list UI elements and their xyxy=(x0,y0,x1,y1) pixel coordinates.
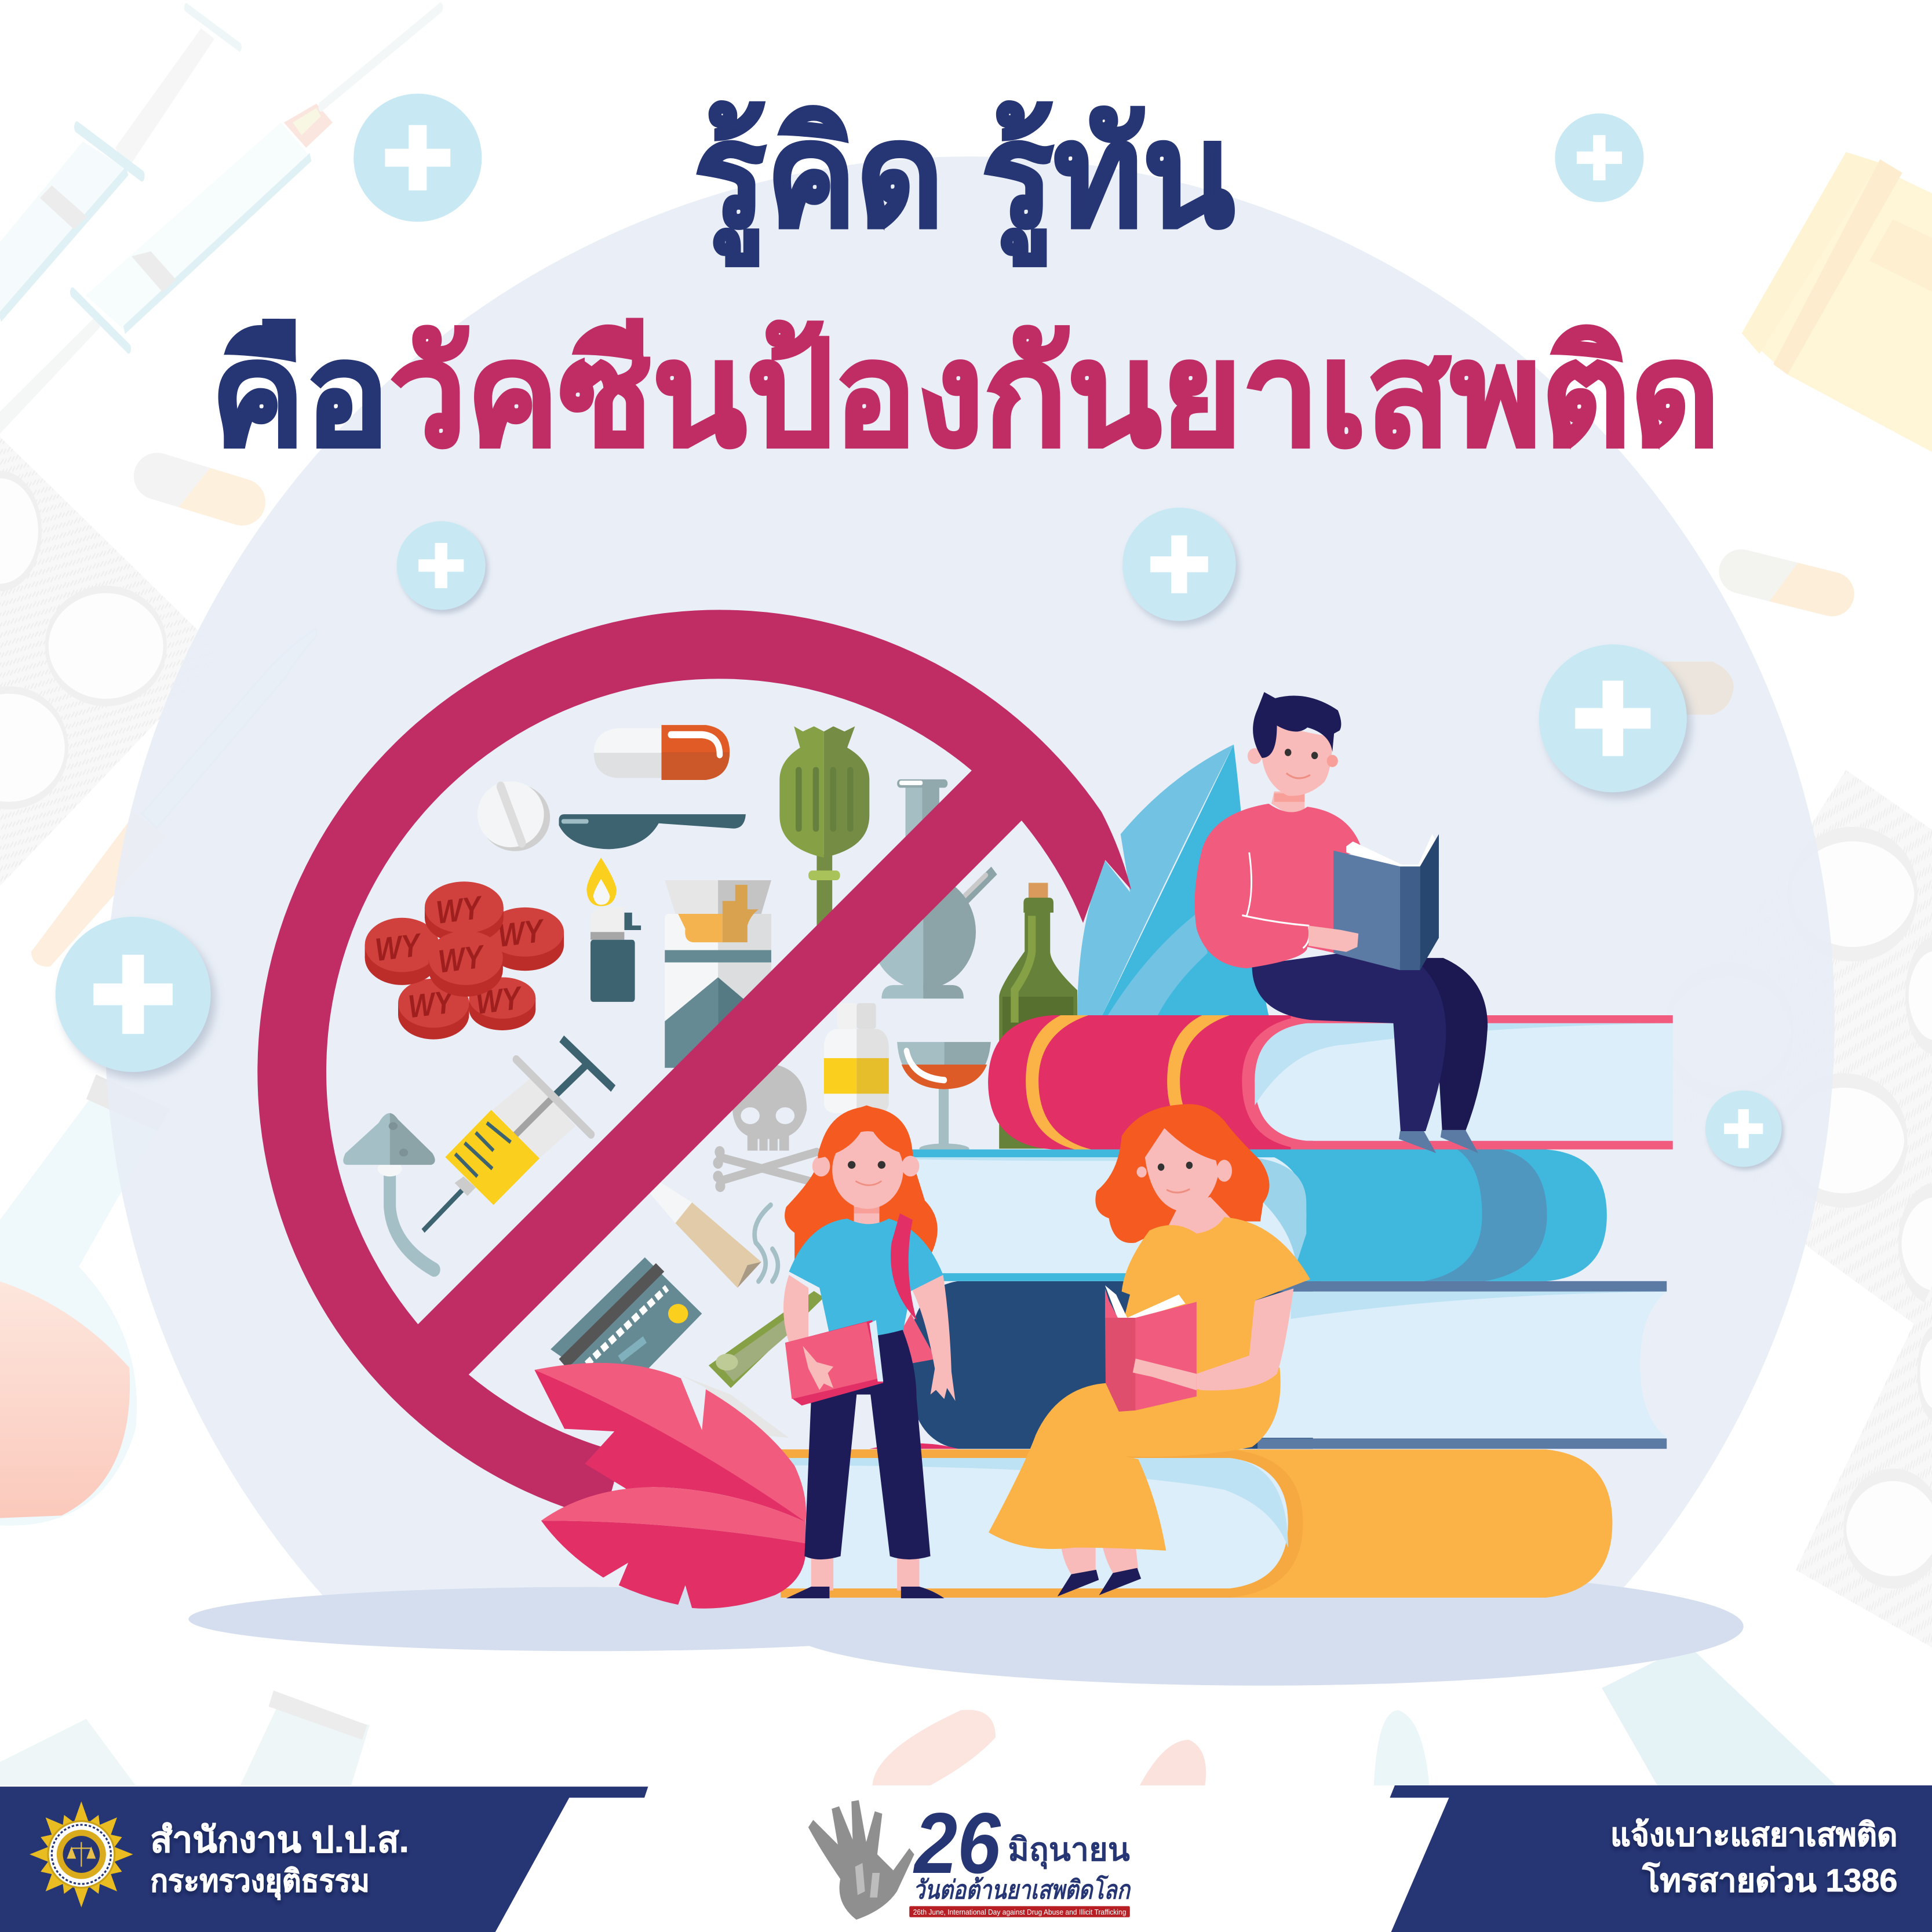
ground shadow xyxy=(188,1568,1744,1686)
plus badge 7 xyxy=(1705,1091,1784,1170)
standing girl xyxy=(783,1105,956,1598)
title line 2: navy part: คือ xyxy=(211,314,389,476)
icon: rolled banknote xyxy=(709,1291,824,1388)
faded blister pack right xyxy=(1649,770,1932,1337)
plus badge 2 xyxy=(1555,114,1643,202)
icon: spoon xyxy=(559,814,746,849)
title line 1: รู้คิด รู้ทัน xyxy=(694,94,1235,266)
icon: syringe xyxy=(423,1039,613,1231)
girl: school bag xyxy=(900,1314,936,1364)
stack of books xyxy=(781,1015,1673,1598)
prohibition sign ring xyxy=(257,610,1131,1519)
blue leaf xyxy=(1077,745,1268,1015)
book: blue second book xyxy=(912,1150,1607,1281)
drug icons inside the prohibition sign xyxy=(343,725,1077,1438)
faded yellow sachet xyxy=(1742,152,1932,452)
book: yellow bottom book xyxy=(781,1449,1612,1598)
icon: lighter xyxy=(586,858,641,1002)
faded ampoule xyxy=(31,628,316,967)
faded blister pack lower right xyxy=(1796,1285,1932,1647)
icon: tablet xyxy=(477,781,550,851)
man: sweater xyxy=(1195,804,1363,968)
man: hand xyxy=(1308,925,1358,952)
icon: laboratory flask / bong xyxy=(870,779,994,998)
icon: white medicine bottle xyxy=(824,1003,889,1113)
girl and pink leaf xyxy=(534,1105,956,1609)
man: shoes xyxy=(1399,1130,1478,1153)
woman: legs and shoes xyxy=(1059,1544,1140,1595)
26 June logo lettering xyxy=(909,1795,1131,1917)
faded flask left xyxy=(0,1074,170,1526)
title line 2: crimson part: วัคซีนป้องกันยาเสพติด xyxy=(389,314,1720,476)
icon: mushroom xyxy=(343,1113,435,1270)
icon: red methamphetamine pills xyxy=(365,881,564,1040)
faded syringe 2 xyxy=(0,8,440,433)
sitting woman xyxy=(989,692,1488,1595)
book: pink top book xyxy=(988,1015,1673,1150)
footer: left navy panel xyxy=(0,1787,648,1932)
plus badge 1 xyxy=(353,94,482,222)
man: book xyxy=(1333,834,1439,970)
icon: liquor bottle xyxy=(999,883,1077,1149)
icon: opium poppy xyxy=(779,726,869,929)
English caption: 26th June, International Day against Drug Abuse and Illicit Trafficking xyxy=(913,1908,1126,1916)
girl: shirt xyxy=(789,1219,943,1340)
footer: white band xyxy=(0,1785,1932,1932)
plus badge 4 xyxy=(1122,508,1240,625)
icon: capsule xyxy=(594,725,730,780)
hand print logo xyxy=(808,1800,914,1920)
icon: skull and crossbones xyxy=(713,1063,816,1192)
man: neck and head xyxy=(1248,692,1341,816)
faded capsule behind plus badge xyxy=(1657,662,1734,715)
book: navy third book xyxy=(869,1281,1667,1449)
icon: wine glass xyxy=(897,1042,991,1154)
girl: book xyxy=(785,1320,883,1405)
man: trousers near leg xyxy=(1252,953,1446,1131)
pink leaf xyxy=(534,1363,806,1609)
woman: neck and face xyxy=(1136,1128,1233,1249)
faded syringe 1 xyxy=(0,8,239,320)
woman: book xyxy=(1105,1285,1197,1412)
faded capsule right xyxy=(1714,545,1859,621)
woman: arm xyxy=(1136,1288,1293,1390)
girl: hand on book xyxy=(803,1346,833,1390)
ONCB emblem xyxy=(30,1802,133,1907)
footer left text: ministry name: กระทรวงยุติธรรม xyxy=(150,1864,370,1900)
month name: มิถุนายน xyxy=(1008,1832,1130,1870)
woman: dress xyxy=(989,1217,1310,1551)
plus badge 5 xyxy=(1539,644,1692,798)
girl: hair back xyxy=(785,1105,938,1268)
background circle xyxy=(106,156,1835,1595)
woman: hand xyxy=(1133,1358,1197,1390)
man: seated reader xyxy=(1195,692,1488,1153)
icon: white powder xyxy=(681,1375,789,1438)
girl: backpack strap xyxy=(891,1213,917,1320)
prohibition sign diagonal bar xyxy=(394,747,1045,1398)
faded bottles and capsules along the bottom xyxy=(0,1645,1836,1785)
man: trousers far leg xyxy=(1421,958,1488,1131)
girl: trousers and feet xyxy=(786,1330,944,1598)
icon: red methamphetamine pills: WY xyxy=(407,983,457,1025)
plus badge 3 xyxy=(397,521,488,614)
Thai day name: วันต่อต้านยาเสพติดโลก xyxy=(913,1875,1131,1905)
faded icons: right side xyxy=(1649,152,1932,1647)
faded blister pack xyxy=(0,437,222,886)
footer right text: hotline: โทรสายด่วน 1386 xyxy=(1642,1862,1897,1898)
icon: hand-rolled cigarette with smoke xyxy=(650,1178,778,1288)
girl: arms xyxy=(783,1275,956,1401)
icon: red methamphetamine pills: WY xyxy=(435,890,484,931)
icon: red methamphetamine pills: WY xyxy=(474,980,524,1022)
red banner xyxy=(909,1906,1130,1917)
icon: credit card xyxy=(551,1257,702,1398)
faded capsule upper left xyxy=(128,447,271,531)
icon: red methamphetamine pills: WY xyxy=(437,939,487,980)
plus badge 6 xyxy=(56,917,216,1078)
icon: cigarette pack xyxy=(665,880,771,1068)
icon: red methamphetamine pills: WY xyxy=(497,913,546,954)
girl: face and neck xyxy=(812,1107,919,1230)
icon: red methamphetamine pills: WY xyxy=(374,927,424,968)
faded medical icons: upper left xyxy=(0,8,440,967)
footer: right navy panel xyxy=(1390,1785,1932,1932)
footer right text: report line: แจ้งเบาะแสยาเสพติด xyxy=(1610,1817,1897,1853)
woman: hair xyxy=(1095,1104,1270,1243)
numeral 26: 26 xyxy=(913,1795,1001,1891)
footer left text: office name: สำนักงาน ป.ป.ส. xyxy=(150,1820,409,1860)
